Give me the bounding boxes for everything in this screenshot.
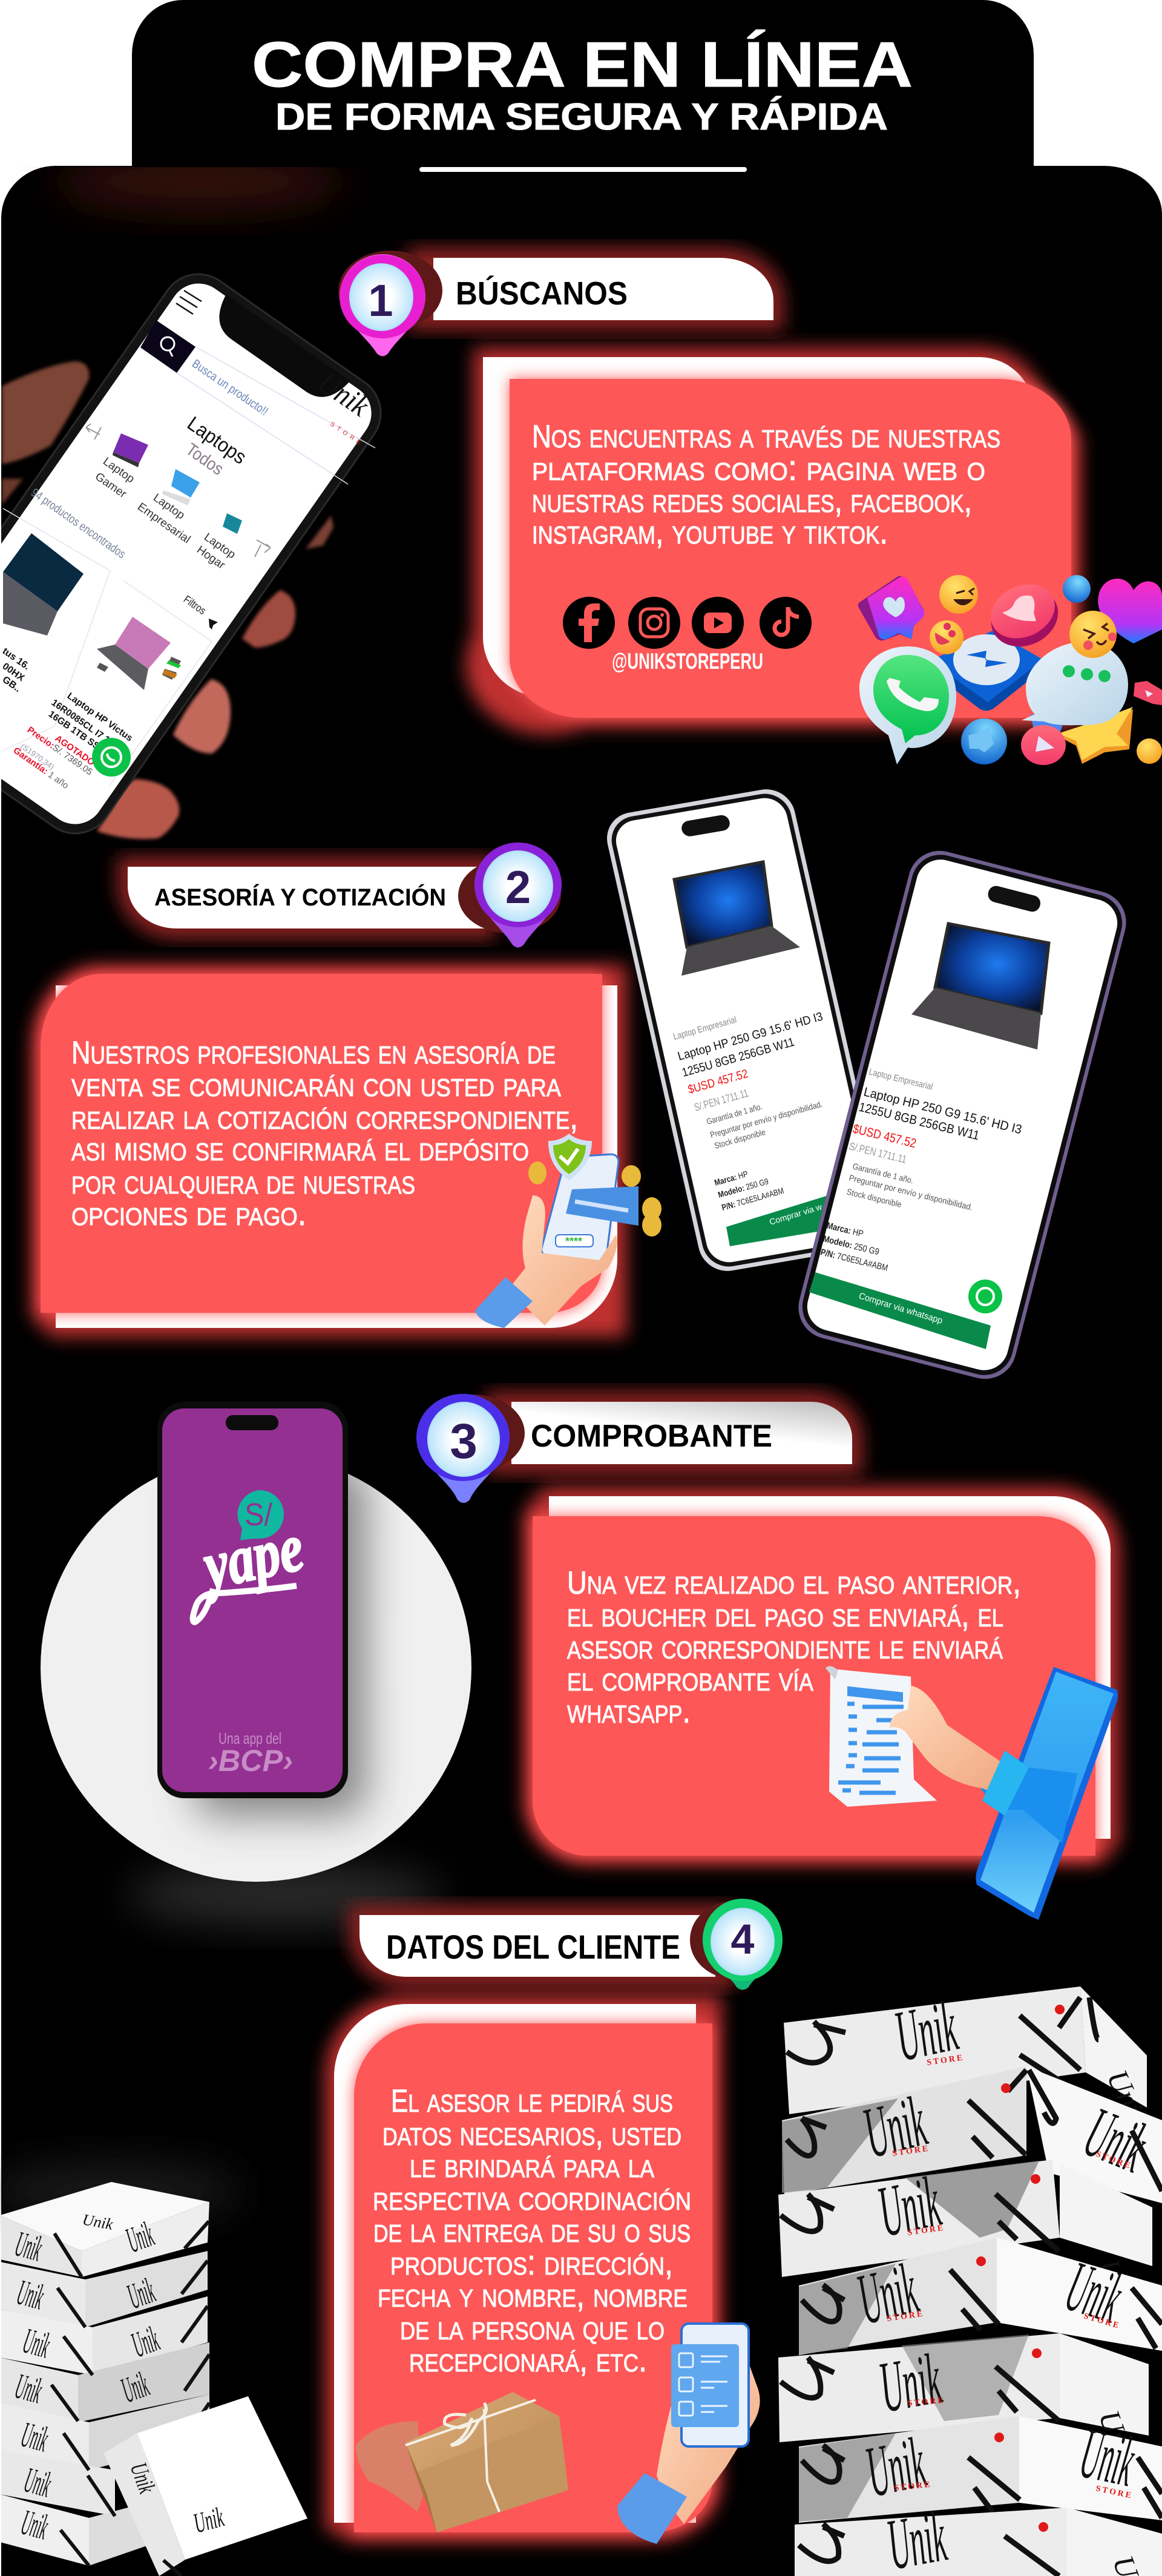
icon: whatsapp bubble [859,646,956,764]
pill glow [359,1915,726,1977]
box row 3: STORE [907,2223,945,2238]
panel text: whatsapp. [567,1691,691,1730]
box row 5: Unik [1092,2406,1144,2473]
box row 4 [799,2238,1162,2355]
panel text: asi mismo se confirmará el depósito [71,1129,529,1168]
pin badge 4 [690,1899,783,1990]
icon: small emoji [1137,738,1162,764]
back card [334,2004,696,2523]
panel 2 [41,974,661,1328]
panel text: de la persona que lo [400,2308,665,2347]
app del label: Una app del [218,1729,281,1747]
pin badge 3: 3 [450,1414,478,1469]
icon: bell [982,574,1068,657]
panel glow [41,974,617,1328]
icon: star [1058,707,1133,764]
panel text [373,2080,691,2379]
phone [542,1154,619,1262]
phone 2 product text: Preguntar por envío y disponibilidad. [848,1172,974,1212]
phone 2 product text: P/N: 7C6E5LA#ABM [819,1247,889,1273]
product phone 1 [602,785,892,1275]
step 3 heading [416,1394,852,1503]
step 2 heading [128,843,562,948]
product card right: Garantía: 1 año [11,745,71,791]
product card right [11,581,212,791]
icon: heart badge [858,576,924,640]
pin badge 2 [458,843,562,948]
panel text: fecha y nombre, nombre [378,2275,688,2315]
search box [140,320,195,373]
social handle: @UNIKSTOREPERU [612,649,763,674]
heading text: DATOS DEL CLIENTE [386,1928,680,1966]
yape logo: yape [191,1510,310,1605]
icon: small play [1134,681,1162,705]
box row 1: STORE [926,2053,965,2068]
phone 1 product text: Preguntar por envío y disponibilidad. [709,1099,824,1140]
icon: like ball [961,718,1007,764]
pill [433,258,773,320]
hand behind phone [2,361,333,839]
pin badge 3 [416,1394,525,1503]
box rows 2 to 7: Unik [116,2364,154,2411]
panel text: venta se comunicarán con usted para [71,1065,562,1104]
panel text: instagram, youtube y tiktok. [532,512,888,551]
box row 5: Unik [874,2339,947,2428]
pin badge 1: 1 [368,275,393,326]
phone 1 product text: P/N: 7C6E5LA#ABM [720,1186,785,1212]
panel text: de la entrega de su o sus [373,2210,691,2250]
category laptop empresarial: Laptop [151,491,187,522]
phone 2 product text: Garantía de 1 año. [852,1161,914,1185]
icon: play [1021,725,1066,765]
box row 5 [778,2333,1149,2473]
panel text: el comprobante vía [567,1659,814,1698]
blue shape behind chat bubble [1030,714,1065,735]
phone 1 product text: Comprar via w [768,1201,824,1227]
pin field [556,1235,593,1247]
icon: emoji wink [1069,611,1117,658]
notch [986,884,1042,913]
pill glow [496,1402,852,1464]
box row 4: STORE [886,2309,925,2324]
panel text: El asesor le pedirá sus [391,2080,673,2120]
phone 1 with hand [0,260,395,848]
panel text: realizar la cotización correspondiente, [71,1097,578,1137]
phone 1 product text: Marca: HP [713,1169,749,1188]
phone 2 product text: 1255U 8GB 256GB W11 [858,1100,980,1143]
hand [508,1195,617,1326]
sleeve [980,1752,1077,1843]
yape bubble [238,1490,284,1540]
icon: magenta heart [1098,579,1162,643]
box row 1: Unik [1100,2065,1156,2132]
stack of boxes left [0,2182,307,2576]
yape logo [191,1510,310,1622]
dark red vignette [54,151,345,212]
category laptop hogar: Hogar [194,544,228,572]
icon: facebook [563,597,615,649]
shadow above left boxes [0,2161,242,2221]
step 4 heading [359,1899,783,1990]
box rows 2 to 7: Unik [20,2460,56,2505]
icon: thumb ball [1063,575,1091,603]
box row 4: Unik [1057,2247,1132,2339]
social media 3d icons [858,574,1162,765]
search placeholder: Busca un producto!! [189,357,271,418]
phone body [0,260,395,848]
category laptop hogar: Laptop [202,531,238,561]
icon: youtube [692,597,744,649]
social icons [563,597,812,649]
category laptop gamer [96,433,148,498]
phone subheading: Todos [182,440,227,479]
box row 1 [0,2182,209,2277]
panel text: plataformas como: pagina web o [532,448,985,488]
heading text: ASESORÍA Y COTIZACIÓN [154,883,446,911]
red card [354,2023,712,2532]
panel text: respectiva coordinación [373,2178,691,2218]
box row 2: STORE [1095,2150,1133,2171]
pin badge 4: 4 [731,1916,755,1963]
box row 2: Unik [856,2081,934,2174]
phone 2 product text: Laptop HP 250 G9 15.6' HD I3 [862,1085,1023,1137]
product card left: 00HX [1,661,27,683]
box rows 2 to 7 [0,2251,209,2566]
box row 3 [778,2160,1152,2322]
category laptop empresarial [135,469,200,546]
box rows 2 to 7: Unik [122,2270,160,2317]
icon: emoji laugh [939,575,978,614]
panel text: productos: dirección, [390,2243,673,2282]
panel text: opciones de pago. [71,1194,306,1233]
pill glow [418,258,773,320]
phone 2 product text: $USD 457.52 [852,1122,917,1151]
phone 2 product text: Modelo: 250 G9 [822,1234,880,1257]
panel text: por cualquiera de nuestras [71,1162,415,1201]
box row 2 [782,2066,1162,2203]
panel glow [533,1496,1111,1856]
notch [219,295,349,397]
panel text: Nuestros profesionales en asesoría de [71,1032,556,1071]
pill [128,867,485,928]
credit card [566,1186,638,1226]
blue phone [976,1667,1118,1920]
icon: hand with phone checklist [617,2324,760,2544]
heading text: COMPROBANTE [531,1419,772,1454]
box row 5: STORE [907,2396,945,2408]
frame [602,785,892,1275]
pin badge 1 [338,251,442,356]
product card right: Laptop HP Victus [65,691,134,744]
icon: hand with phone and card: **** [565,1235,582,1247]
notch [680,814,731,838]
red card [533,1516,1095,1856]
heading text: BÚSCANOS [456,275,628,312]
whatsapp button [92,738,131,777]
box rows 2 to 7: Unik [17,2414,53,2460]
product card left [1,508,110,751]
product card right: 16R0085CL I7 137 [50,697,120,751]
category laptop hogar [197,513,242,568]
box rows 2 to 7: Unik [17,2502,53,2548]
panel 3 [533,1496,1118,1920]
panel text [567,1562,1021,1730]
red card [41,974,602,1313]
phone 1 product text: $USD 457.52 [686,1067,750,1097]
frame [792,844,1133,1386]
icon: hand with package [356,2392,568,2532]
panel text: recepcionará, etc. [409,2340,647,2379]
search bar line [177,347,375,484]
phone 2 product text: Comprar via whatsapp [858,1291,944,1326]
title underline [419,167,747,172]
arrows [86,424,271,557]
panel text [71,1032,578,1233]
panel text: datos necesarios, usted [382,2114,681,2153]
box row 1: Unik [11,2224,47,2269]
icon: messenger badge [930,631,1043,711]
BCP label: ›BCP› [208,1744,293,1778]
panel glow [474,357,1071,725]
phone 1 product text: Stock disponible [713,1127,767,1151]
stack of boxes right [778,1986,1162,2576]
product card right: AGOTADO [53,733,97,768]
product card left: GB.. [1,674,22,694]
header tab [132,0,1034,188]
panel text: le brindará para la [410,2146,655,2185]
step 1 heading [338,251,773,356]
products found: 94 productos encontrados [28,486,128,561]
panel text: asesor correspondiente le enviará [567,1627,1003,1666]
phone 2 product text: S/.PEN 1711.11 [848,1140,908,1166]
cuff [475,1277,533,1328]
icon: emoji hearts [930,620,963,654]
phone 2 product text: Stock disponible [845,1186,903,1209]
panel 1 [474,357,1071,725]
panel text: nuestras redes sociales, facebook, [532,481,972,520]
box row 1: Unik [81,2210,114,2233]
box row 4: Unik [850,2249,925,2340]
pill [359,1915,715,1977]
filters [182,593,218,629]
soft grey glow under plate [127,1864,442,1925]
button [809,1272,991,1349]
box rows 2 to 7: Unik [126,2319,165,2365]
panel glow [334,2004,712,2532]
title line 1: COMPRA EN LÍNEA [252,29,913,100]
box row 3: Unik [872,2161,947,2252]
box row 6 [799,2413,1162,2523]
phone 1 laptop [674,862,800,976]
back card [483,357,1034,697]
phone 1 product text: S/.PEN 1711.11 [693,1087,750,1114]
product phone 2 [792,844,1133,1386]
product card right: Precio:S/. 7369.05 [25,724,94,777]
box row 3: Unik [1092,2255,1144,2322]
box row 1: Unik [888,1986,964,2077]
tilted white box: Unik [191,2502,228,2540]
phone 2 product text: Laptop Empresarial [868,1066,934,1092]
coins [528,1162,661,1237]
box rows 2 to 7: Unik [19,2321,54,2366]
box rows 2 to 7: Unik [13,2272,48,2318]
category laptop gamer: Gamer [93,470,129,501]
title line 2: DE FORMA SEGURA Y RÁPIDA [275,96,888,138]
phone 1 product text: Modelo: 250 G9 [717,1176,770,1200]
tilted white box [103,2396,307,2576]
yape phone [157,1402,348,1798]
button [726,1196,847,1246]
yape bubble: S/ [245,1497,273,1533]
Unik logo on phone [330,389,368,444]
cuff [982,1750,1029,1816]
notch [226,1415,278,1430]
Unik logo on phone: Unik [312,365,376,423]
icon: tiktok [760,597,812,649]
box row 6: STORE [1095,2484,1134,2501]
box row 2: STORE [891,2144,930,2158]
phone 1 product text: Garantía de 1 año. [705,1102,763,1126]
title [252,29,913,172]
icon: receipt and hand from phone [826,1666,1118,1920]
box row 7 [795,2497,1162,2576]
phone 2 product text: Marca: HP [826,1220,864,1240]
phone 2 laptop [911,924,1049,1050]
category laptop empresarial: Empresarial [135,501,192,546]
phone 1 product text: 1255U 8GB 256GB W11 [680,1036,796,1080]
box row 6: Unik [859,2422,933,2512]
panel text [532,416,1000,551]
box rows 2 to 7: Unik [11,2366,47,2411]
box row 1 [784,1986,1156,2132]
icon: hand with phone and card [475,1134,661,1328]
pill glow [128,867,485,928]
phone 1 product text: Laptop HP 250 G9 15.6' HD I3 [676,1010,824,1063]
back card [549,1496,1111,1839]
phone 2 product text [809,1066,1023,1349]
pin badge 2: 2 [505,862,531,913]
filters: Filtros [182,593,208,617]
phone heading: Laptops [183,412,251,468]
box row 1: Unik [121,2214,159,2261]
pill [511,1402,852,1464]
panel text: el boucher del pago se enviará, el [567,1595,1003,1634]
icon: instagram [628,597,680,649]
box row 6: STORE [894,2480,932,2493]
shield [548,1134,592,1180]
panel text: Nos encuentras a través de nuestras [532,416,1000,455]
product card right: (S1970.34) [19,741,56,771]
whatsapp badge [968,1280,1002,1313]
hand [890,1686,1005,1790]
phone 1 product text: Laptop Empresarial [672,1014,738,1042]
product card left: tus 16. [1,646,31,672]
box row 4: STORE [1083,2312,1121,2331]
yape plate [41,1453,471,1882]
tilted white box: Unik [125,2459,161,2497]
panel text: Una vez realizado el paso anterior, [567,1562,1021,1602]
hamburger icon [176,291,202,314]
receipt [826,1666,937,1807]
panel 4 [334,2004,760,2544]
red card [510,379,1071,718]
Unik logo on phone: STORE [329,421,365,448]
icon: chat bubble [1022,642,1128,725]
category laptop gamer: Laptop [100,455,137,485]
phone 1 product text [672,1010,847,1246]
back card [56,985,617,1328]
product card right: 16GB 1TB SSD W [47,709,117,763]
